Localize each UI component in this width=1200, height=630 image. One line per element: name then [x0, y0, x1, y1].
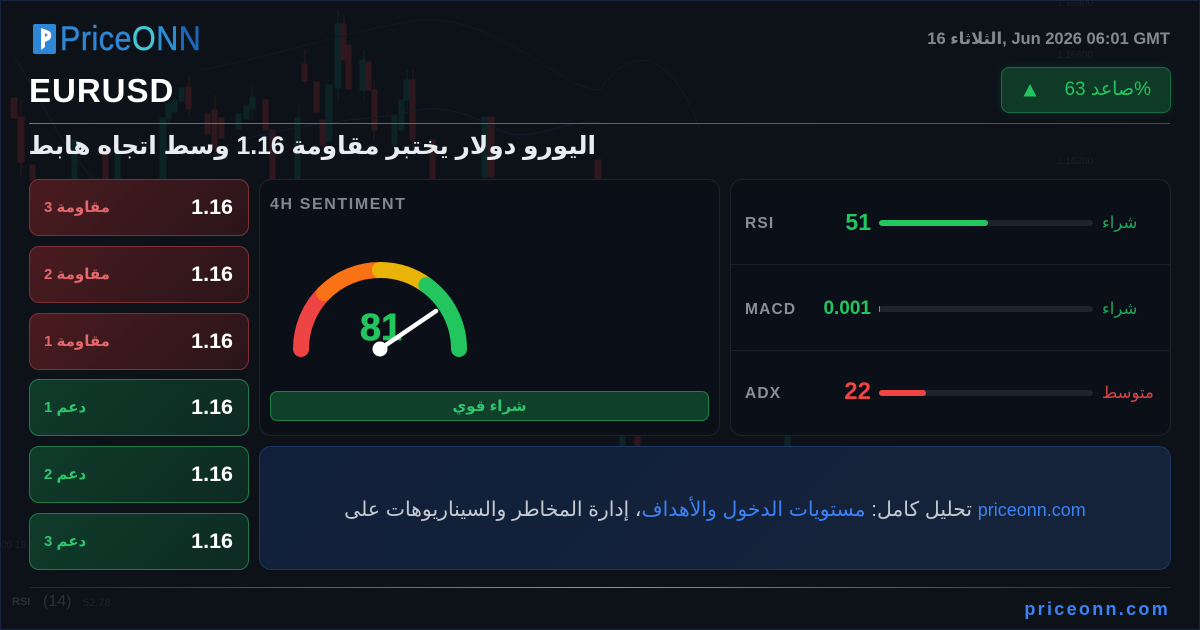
background candlestick chart: 00 19	[1, 540, 26, 551]
trend badge	[1001, 67, 1171, 113]
panel heading: 4H SENTIMENT	[270, 196, 407, 213]
level: support 3: دعم 3	[44, 533, 86, 550]
call to action text: priceonn.com تحليل كامل: مستويات الدخول والأهداف، إدارة المخاطر والسيناريوهات على	[344, 499, 1086, 521]
level: resistance 1: مقاومة 1	[44, 333, 110, 350]
indicator: MACD: 0.001	[823, 298, 871, 319]
sentiment label	[270, 391, 709, 421]
symbol heading: EURUSD	[29, 72, 174, 109]
indicator: ADX: ADX	[745, 385, 781, 402]
level: support 3	[29, 513, 249, 570]
background candlestick chart: 52.78	[83, 597, 111, 609]
indicator: MACD: MACD	[745, 301, 796, 318]
indicator: RSI: شراء	[1102, 214, 1137, 232]
level: resistance 3	[29, 179, 249, 236]
indicator: RSI: 51	[845, 209, 871, 235]
logo wordmark: PriceONN	[60, 20, 201, 58]
level: resistance 1: 1.16	[191, 329, 233, 353]
level: resistance 3: مقاومة 3	[44, 199, 110, 216]
level: support 2	[29, 446, 249, 503]
indicator: ADX: متوسط	[1102, 384, 1154, 402]
logo: PriceONN	[33, 20, 201, 58]
background candlestick chart: (14)	[43, 593, 71, 610]
footer website: priceonn.com	[1024, 599, 1170, 619]
indicator: RSI	[745, 209, 1137, 235]
level: resistance 1	[29, 313, 249, 370]
indicator: MACD	[745, 298, 1137, 319]
panel: indicators	[730, 179, 1171, 436]
level: support 1: دعم 1	[44, 399, 86, 416]
background candlestick chart: 1.16400	[1057, 102, 1094, 113]
headline: اليورو دولار يختبر مقاومة 1.16 وسط اتجاه هابط	[28, 133, 596, 160]
level: support 3: 1.16	[191, 529, 233, 553]
background candlestick chart: 1.16600	[1057, 50, 1094, 61]
icon: up triangle	[1024, 84, 1036, 96]
panel: call to action	[259, 446, 1171, 570]
badge label: %صاعد 63	[1064, 79, 1151, 100]
gauge chart: 81	[360, 307, 402, 349]
indicator: RSI: RSI	[745, 215, 774, 232]
footer divider	[29, 587, 1170, 588]
level: support 1: 1.16	[191, 395, 233, 419]
gauge chart	[293, 262, 467, 357]
background candlestick chart: 1.16200	[1057, 156, 1094, 167]
header divider	[29, 123, 1170, 124]
level: resistance 2	[29, 246, 249, 303]
background candlestick chart: RSI	[12, 596, 30, 608]
icon: logo mark	[33, 24, 56, 54]
indicator: ADX: 22	[844, 378, 871, 405]
indicator: ADX	[745, 378, 1154, 405]
level: resistance 2: 1.16	[191, 262, 233, 286]
level: resistance 3: 1.16	[191, 195, 233, 219]
indicator: MACD: شراء	[1102, 300, 1137, 318]
date and time: 16 الثلاثاء, Jun 2026 06:01 GMT	[927, 30, 1170, 48]
level: support 2: 1.16	[191, 462, 233, 486]
panel: 4H sentiment gauge	[259, 179, 720, 436]
sentiment label: شراء قوي	[452, 398, 527, 415]
level: resistance 2: مقاومة 2	[44, 266, 110, 283]
level: support 2: دعم 2	[44, 466, 86, 483]
level: support 1	[29, 379, 249, 436]
